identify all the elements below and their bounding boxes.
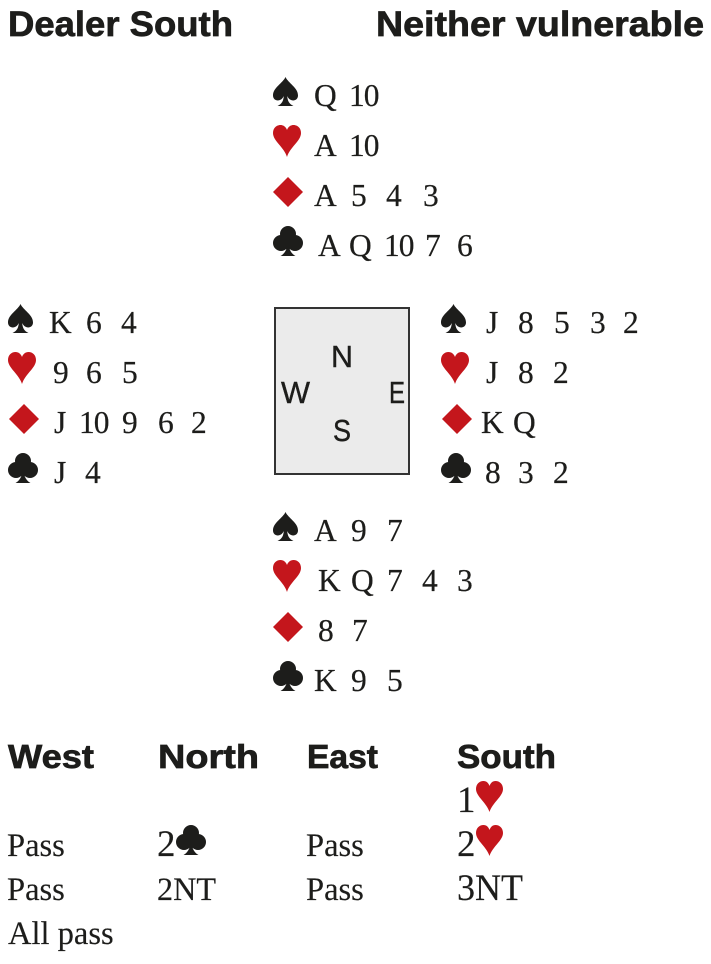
south clubs: 9 [351,663,367,698]
panel: west hand [8,304,207,490]
west diamonds: 9 [122,405,138,440]
east clubs: 3 [518,455,534,490]
south hearts: Q [351,563,374,598]
north hearts: A [314,128,337,163]
north hearts: 10 [349,128,379,163]
bid: south 1 heart [457,780,503,821]
east spades: 2 [623,305,639,340]
compass east: E [389,375,405,410]
icon: west club [8,453,38,483]
west spades: 6 [86,305,102,340]
east hearts: 2 [553,355,569,390]
bid: west pass: Pass [7,872,65,908]
bid: north 2 clubs: 2 [157,824,176,865]
east diamonds: K [481,405,504,440]
bid: south 2 hearts [457,824,503,865]
bidding header: north: North [158,738,259,775]
north spades: 10 [349,78,379,113]
icon: west diamond [9,404,39,434]
bidding header: east: East [307,738,378,775]
east spades: 3 [590,305,606,340]
bid: south 3NT: 3NT [457,868,523,909]
compass south: S [333,413,351,448]
north diamonds: A [314,178,337,213]
icon: north heart [273,125,301,157]
east hearts: 8 [518,355,534,390]
north diamonds: 5 [351,178,367,213]
north clubs: 7 [425,228,441,263]
icon: west spade [8,304,33,333]
west hearts: 5 [122,355,138,390]
icon: east spade [441,304,466,333]
west clubs: 4 [85,455,101,490]
east spades: 5 [554,305,570,340]
icon: south club [273,661,303,691]
panel: bidding table [7,738,556,952]
east hearts: J [486,355,498,390]
west diamonds: J [54,405,66,440]
west diamonds: 2 [191,405,207,440]
bid: east pass: Pass [306,828,364,864]
bid: west pass: Pass [7,828,65,864]
icon: south diamond [273,612,303,642]
bidding header: west: West [8,738,94,775]
heading: dealer: Dealer South [8,5,233,44]
icon: east club [441,453,471,483]
east spades: 8 [518,305,534,340]
east clubs: 2 [553,455,569,490]
icon: north diamond [273,177,303,207]
panel: compass table [275,308,409,474]
bid: all pass: All pass [8,916,114,952]
east spades: J [486,305,498,340]
north clubs: Q [349,228,372,263]
bid: south 2 hearts: 2 [457,824,476,865]
south hearts: 4 [422,563,438,598]
north clubs: 10 [384,228,414,263]
bid: north 2 clubs [157,824,206,865]
south hearts: 7 [387,563,403,598]
west diamonds: 10 [79,405,109,440]
bid: south 1 heart: 1 [457,780,476,821]
east clubs: 8 [485,455,501,490]
south hearts: K [318,563,341,598]
bid: east pass: Pass [306,872,364,908]
icon: north club [273,226,303,256]
panel: north hand [273,77,473,263]
icon: west heart [8,352,36,384]
icon: south spade [273,512,298,541]
south spades: A [314,513,337,548]
south clubs: K [314,663,337,698]
west diamonds: 6 [158,405,174,440]
north diamonds: 3 [423,178,439,213]
south diamonds: 8 [318,613,334,648]
icon: east heart [441,352,469,384]
icon: north spade [273,77,298,106]
south diamonds: 7 [352,613,368,648]
west hearts: 9 [53,355,69,390]
north spades: Q [314,78,337,113]
table box [275,308,409,474]
west spades: 4 [121,305,137,340]
south spades: 7 [387,513,403,548]
north clubs: A [318,228,341,263]
west clubs: J [54,455,66,490]
panel: south hand [273,512,473,698]
compass north: N [331,339,353,374]
south clubs: 5 [387,663,403,698]
south spades: 9 [351,513,367,548]
compass west: W [281,375,311,410]
bidding header: south: South [457,738,556,775]
east diamonds: Q [513,405,536,440]
north clubs: 6 [457,228,473,263]
icon: south heart [273,560,301,592]
south hearts: 3 [457,563,473,598]
heading: vulnerability: Neither vulnerable [376,5,704,44]
icon: east diamond [442,404,472,434]
panel: east hand [441,304,639,490]
north diamonds: 4 [386,178,402,213]
west hearts: 6 [86,355,102,390]
bid: north 2NT: 2NT [157,872,216,908]
west spades: K [49,305,72,340]
